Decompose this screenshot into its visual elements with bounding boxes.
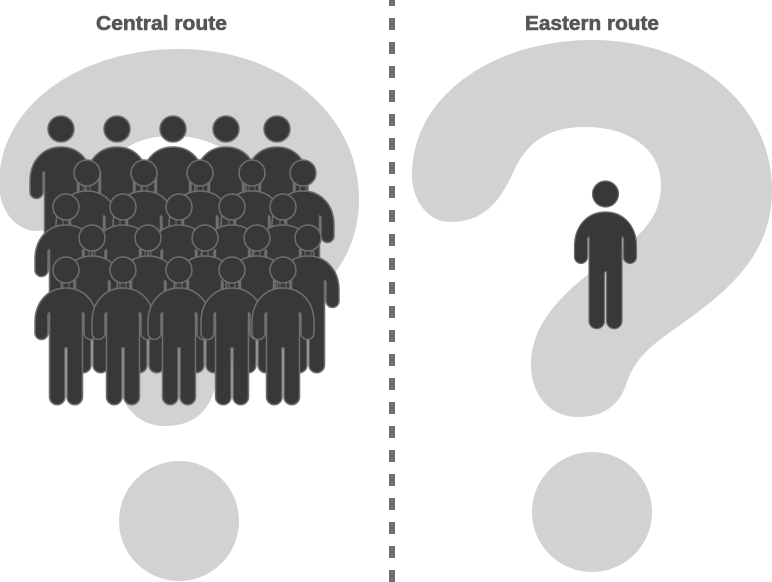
central divider: [389, 0, 395, 582]
panel: eastern route question mark: [412, 40, 772, 572]
icon: single person, eastern route: [574, 181, 636, 329]
panel: central route question mark: [0, 49, 359, 581]
heading: Central route: Central route: [96, 13, 227, 35]
heading: Eastern route: Eastern route: [525, 13, 659, 35]
crowd of people: central route: [30, 116, 339, 405]
